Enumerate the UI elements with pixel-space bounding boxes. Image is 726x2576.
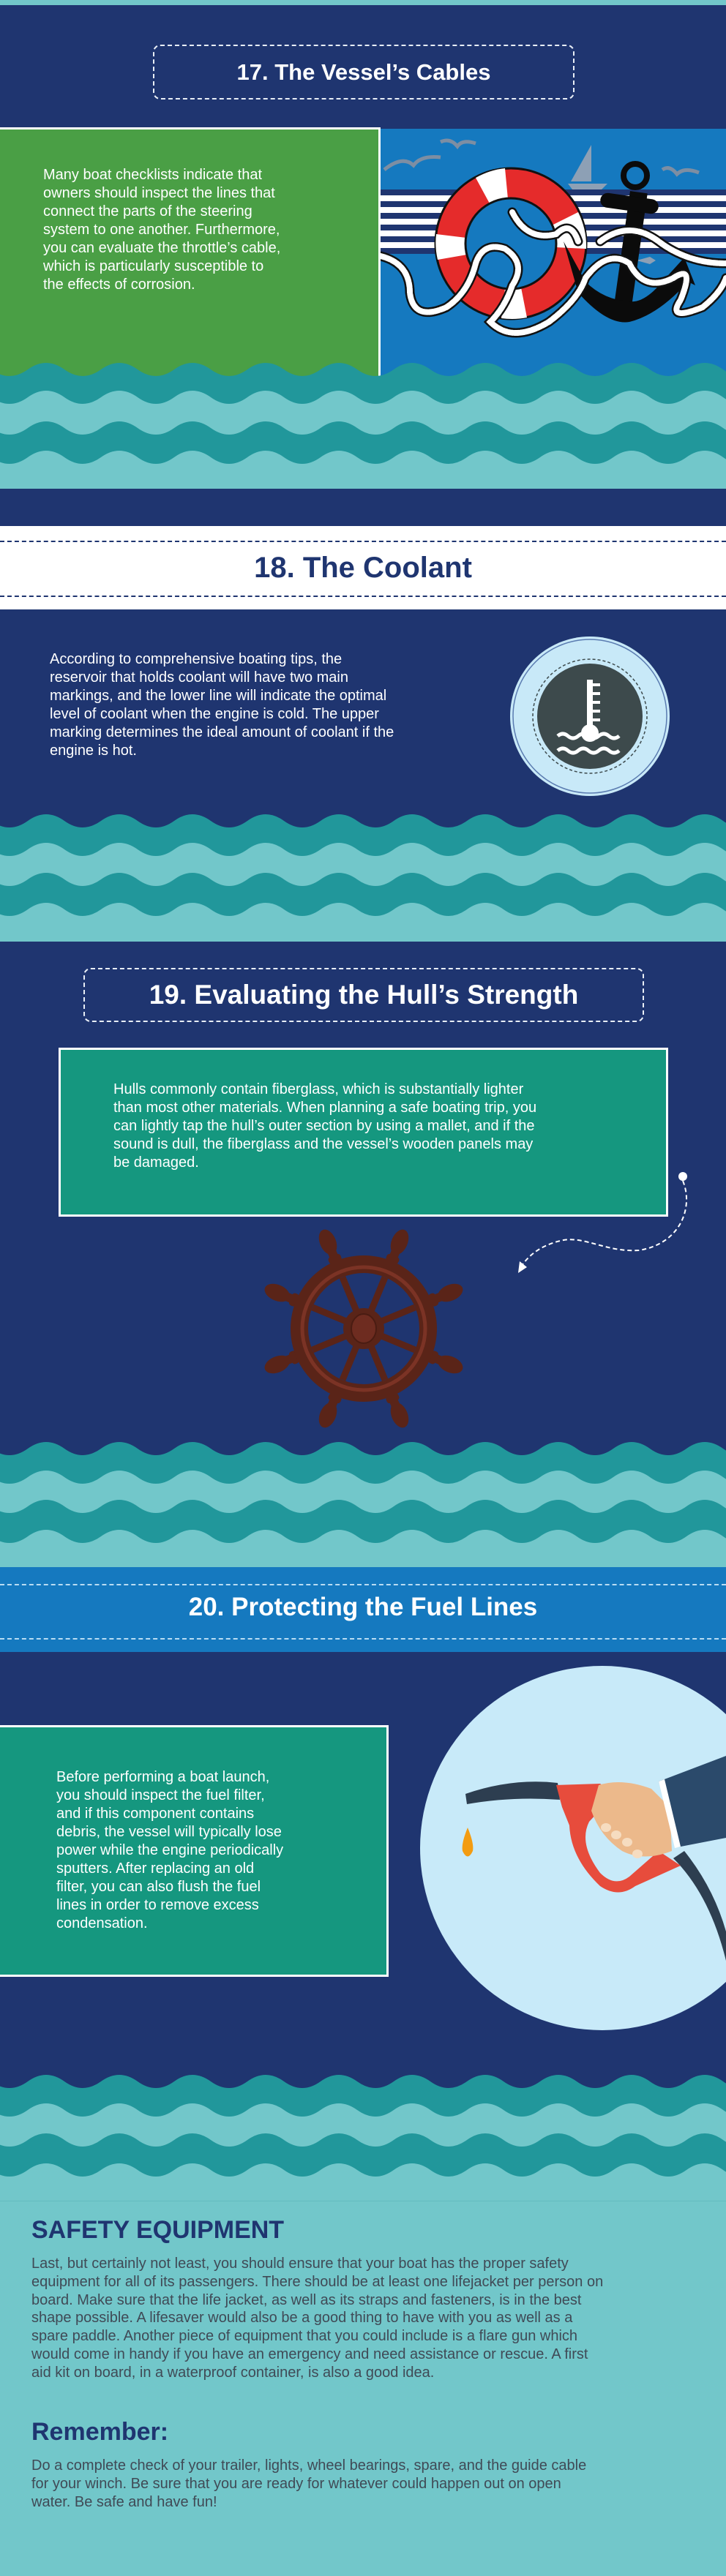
text: cables: [43, 167, 280, 293]
text: remember: Do a complete check of your trailer, lights, wheel bearings, spare, and the guide cable: [31, 2457, 586, 2474]
text: remember: [31, 2457, 586, 2510]
text: fuel: sputters. After replacing an old: [56, 1860, 254, 1877]
title: 17: 17. The Vessel’s Cables: [237, 59, 490, 85]
anchor: [564, 164, 695, 322]
arrow: dotted curve: [518, 1172, 688, 1273]
birds: [384, 140, 699, 174]
text: cables: system to one another. Furthermore,: [43, 222, 280, 238]
text: coolant: [50, 651, 394, 759]
text: safety equipment: [31, 2256, 603, 2381]
text: fuel: lines in order to remove excess: [56, 1897, 259, 1913]
text: remember: water. Be safe and have fun!: [31, 2494, 217, 2510]
title band: 20: [0, 1567, 726, 1652]
text: safety equipment: equipment for all of its passengers. There should be at least one lifejacket per person on: [31, 2274, 603, 2290]
illustration: life ring and anchor: [381, 129, 726, 376]
text: hull: Hulls commonly contain fiberglass, which is substantially lighter: [113, 1081, 523, 1097]
text: cables: owners should inspect the lines that: [43, 185, 275, 201]
icon: coolant thermometer: [510, 637, 670, 796]
title: 19: 19. Evaluating the Hull’s Strength: [149, 980, 578, 1010]
waves 2: [0, 814, 726, 942]
bottom teal background: [0, 2166, 726, 2576]
text: safety equipment: aid kit on board, in a waterproof container, is also a good idea.: [31, 2365, 434, 2381]
panel: fuel text: [0, 1725, 389, 1977]
text: cables: Many boat checklists indicate that: [43, 167, 262, 183]
text: coolant: markings, and the lower line will indicate the optimal: [50, 688, 386, 704]
text: safety equipment: shape possible. A lifesaver would also be a good thing to have with you as well as a: [31, 2310, 572, 2326]
text: cables: which is particularly susceptible to: [43, 258, 263, 274]
text: fuel: power while the engine periodically: [56, 1842, 283, 1858]
text: hull: can lightly tap the hull’s outer section by using a mallet, and if the: [113, 1118, 535, 1134]
icon: ship wheel: [265, 1229, 463, 1428]
text: coolant: marking determines the ideal amount of coolant if the: [50, 724, 394, 740]
text: coolant: level of coolant when the engine is cold. The upper: [50, 706, 379, 722]
top teal strip: [0, 0, 726, 5]
title: 18: 18. The Coolant: [254, 552, 472, 584]
text: safety equipment: board. Make sure that the life jacket, as well as its straps and fasteners, is in the best: [31, 2292, 581, 2308]
title band: 18: [0, 526, 726, 609]
text: safety equipment: would come in handy if you have an emergency and need assistance or rescue. A first: [31, 2346, 588, 2362]
text: coolant: reservoir that holds coolant will have two main: [50, 669, 348, 686]
text: coolant: engine is hot.: [50, 743, 137, 759]
title: 17: [153, 45, 575, 99]
text: fuel: [56, 1769, 284, 1931]
title: 19: [83, 968, 644, 1022]
text: cables: connect the parts of the steering: [43, 203, 252, 219]
text: safety equipment: spare paddle. Another piece of equipment that you could include is a flare gun which: [31, 2328, 577, 2344]
text: cables: the effects of corrosion.: [43, 277, 195, 293]
panel: hull text: [59, 1048, 668, 1217]
sailboat: [571, 145, 591, 181]
text: hull: than most other materials. When planning a safe boating trip, you: [113, 1100, 536, 1116]
panel: cables text: [0, 127, 381, 376]
waves 1: [0, 363, 726, 489]
text: fuel: Before performing a boat launch,: [56, 1769, 269, 1785]
rope: [381, 212, 726, 333]
text: remember: for your winch. Be sure that you are ready for whatever could happen out on open: [31, 2476, 561, 2492]
waves 4: [0, 2075, 726, 2201]
text: hull: be damaged.: [113, 1154, 199, 1171]
fish: [634, 257, 656, 264]
text: fuel: debris, the vessel will typically lose: [56, 1824, 282, 1840]
text: fuel: condensation.: [56, 1915, 148, 1931]
text: safety equipment: Last, but certainly not least, you should ensure that your boat has the proper safety: [31, 2256, 569, 2272]
text: fuel: filter, you can also flush the fuel: [56, 1879, 261, 1895]
illustration: fuel nozzle: [420, 1666, 726, 2030]
waves 3: [0, 1442, 726, 1567]
heading: safety equipment: SAFETY EQUIPMENT: [31, 2216, 284, 2244]
title: 20: 20. Protecting the Fuel Lines: [189, 1593, 537, 1621]
text: hull: [113, 1081, 536, 1171]
life ring: [435, 168, 586, 319]
text: hull: sound is dull, the fiberglass and the vessel’s wooden panels may: [113, 1136, 533, 1152]
heading: remember: Remember:: [31, 2418, 168, 2446]
text: fuel: and if this component contains: [56, 1806, 254, 1822]
text: fuel: you should inspect the fuel filter,: [56, 1787, 265, 1803]
text: coolant: According to comprehensive boating tips, the: [50, 651, 342, 667]
text: cables: you can evaluate the throttle’s cable,: [43, 240, 280, 256]
